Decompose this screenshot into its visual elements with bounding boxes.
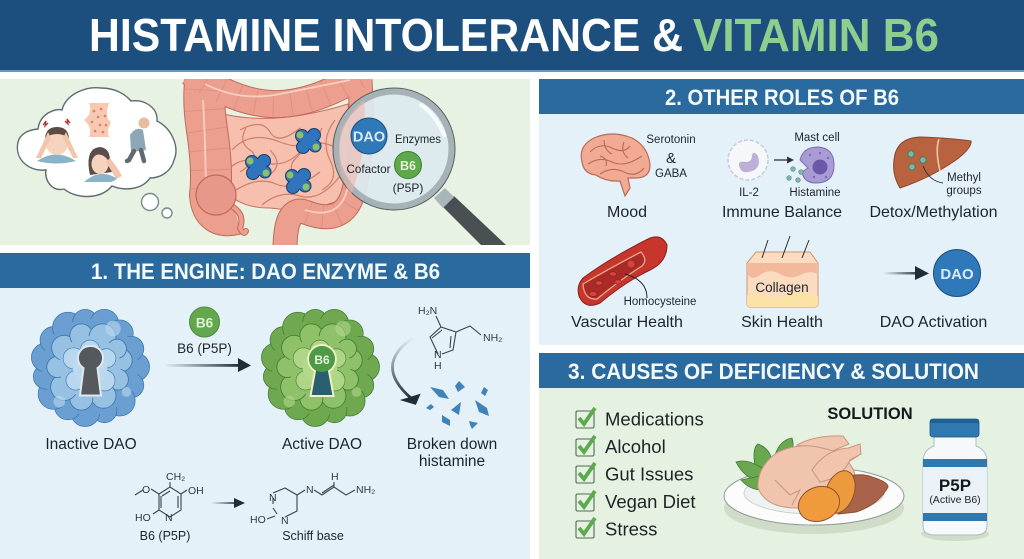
checklist: causes [576,408,704,540]
label: DAO activation: DAO Activation [880,314,987,331]
molecule: Schiff base [250,471,375,527]
P5P label: (P5P) [393,181,423,195]
item: alcohol: Alcohol [605,436,666,457]
icon: skin rash [84,103,111,137]
label: methyl groups: Methyl [947,172,981,184]
B6 badge [394,152,422,178]
label: collagen: Collagen [755,280,809,295]
DAO badge [351,118,387,154]
labels: immune: Histamine [789,187,841,199]
icon: B6 coenzyme: B6 [196,316,214,330]
icon: brain [581,134,650,196]
label: immune balance: Immune Balance [722,204,842,221]
role: vascular health [571,237,696,331]
icon: headache man [36,119,78,164]
label: homocysteine: Homocysteine [624,296,696,308]
label: vascular health: Vascular Health [571,314,683,331]
labels: immune [739,132,841,199]
panel: other roles of B6 [539,79,1024,345]
heading: section 1: 1. THE ENGINE: DAO ENZYME & B6 [91,259,440,284]
label: broken down histamine [407,436,497,470]
molecule: B6 P5P [135,471,204,524]
panel: the engine [0,253,530,559]
molecule: B6 P5P: O [142,484,150,496]
icon: active DAO [261,309,380,427]
molecule: B6 P5P: CH₂ [166,471,185,483]
label: methyl groups [946,172,982,197]
label: methyl groups: groups [946,185,982,197]
heading: section 3 [539,353,1024,388]
label: active DAO: Active DAO [282,436,362,453]
label: inactive DAO: Inactive DAO [45,436,137,453]
molecule: B6 P5P: OH [188,485,204,497]
panel: causes and solution [539,353,1024,559]
icon: histamine fragments [426,381,489,429]
label: Schiff base: Schiff base [282,529,344,543]
molecule: Schiff base: N [281,515,289,527]
role: mood [581,134,696,221]
molecule: Schiff base: NH₂ [356,484,375,496]
label: B6 (P5P): B6 (P5P) [177,341,232,356]
item: vegan diet: Vegan Diet [605,491,696,512]
icon: B6 coenzyme [190,307,220,337]
icon: intestines [190,70,365,250]
labels: immune: IL-2 [739,187,759,199]
keyhole: locked [78,346,103,396]
arrow: breakdown [392,337,418,403]
label: broken down histamine: Broken down [407,436,497,453]
enzymes label: Enzymes [395,132,441,146]
arrow: methyl groups [923,166,943,183]
heading: section 2: 2. OTHER ROLES OF B6 [665,85,899,110]
icon: DAO enzyme clusters [246,128,321,194]
label: serotonin and GABA: Serotonin [646,134,696,146]
B6 badge: B6 [400,159,416,173]
molecule: B6 P5P: N [165,512,173,524]
panel: gut overview [0,79,530,245]
icon: plate of chicken and sweet potato [724,436,904,534]
label: serotonin and GABA: GABA [655,168,687,180]
icon: liver [894,137,971,188]
item: medications: Medications [605,408,704,430]
icon: blood vessel [578,237,667,305]
item: gut issues: Gut Issues [605,464,693,484]
cofactor label: Cofactor [346,162,390,176]
heading: section 2 [539,79,1024,114]
icon: mast cell [787,147,834,183]
molecule: Schiff base: HO [250,514,266,526]
molecule: histamine: N [434,349,442,361]
label: active B6: (Active B6) [929,494,981,506]
molecule: histamine: H₂N [418,305,437,317]
label: serotonin and GABA: & [666,150,676,167]
keyhole with B6: B6 [314,353,330,367]
colon [190,70,365,250]
molecule: Schiff base: H [331,471,339,483]
molecule: Schiff base: N [269,492,277,504]
sweet potato [793,467,888,527]
arrow: to mast cell [774,156,794,164]
title: HISTAMINE INTOLERANCE & [89,9,683,61]
label: skin health: Skin Health [741,314,823,331]
label: solution: SOLUTION [827,405,913,423]
role: detox and methylation [869,137,998,221]
title: VITAMIN B6 [693,9,939,61]
icon: woman holding head [84,147,122,182]
heading: section 1 [0,253,530,288]
icon: DAO circle: DAO [940,266,974,283]
title banner [0,0,1024,72]
label: detox/methylation: Detox/Methylation [869,204,998,221]
icon: immune cell [728,140,768,180]
label: broken down histamine: histamine [419,453,485,470]
labels: immune: Mast cell [794,132,840,144]
role: DAO activation [880,250,987,331]
molecule: B6 P5P: HO [135,512,151,524]
icon: skin layers [747,236,818,307]
icon: tired walking figure [127,118,150,161]
chicken [758,436,861,508]
molecule: histamine [418,305,502,372]
small intestine [226,103,348,210]
thought bubble with symptoms [17,88,176,218]
arrow: activation [164,358,251,372]
role: skin health [741,236,823,331]
icon: P5P bottle [921,419,989,541]
arrow: to Schiff base [211,498,245,508]
molecule: histamine: NH₂ [483,332,502,344]
DAO badge: DAO [353,130,385,146]
label: serotonin and GABA [646,134,696,180]
molecule: Schiff base: N [306,484,314,496]
arrow: to DAO [883,266,929,280]
arrow: homocysteine [625,274,647,298]
role: immune balance [722,132,842,221]
garnish leaves [736,438,793,490]
item: stress: Stress [605,518,657,540]
heading: section 3: 3. CAUSES OF DEFICIENCY & SOLUTION [568,359,979,384]
label: P5P: P5P [939,476,971,495]
magnifying glass callout [333,88,506,256]
icon: inactive DAO [31,309,150,427]
label: mood: Mood [607,204,647,221]
label: B6 P5P structure: B6 (P5P) [140,529,190,543]
molecule: histamine: H [434,360,442,372]
